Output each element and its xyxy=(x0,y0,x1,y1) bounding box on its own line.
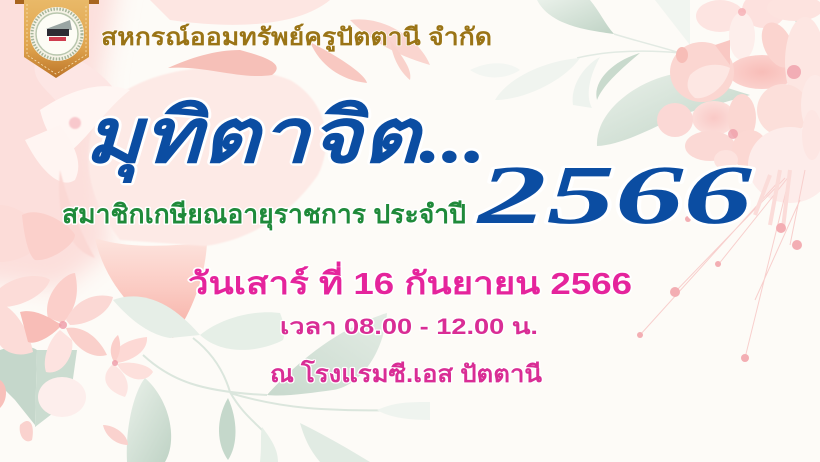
time: เวลา 08.00 - 12.00 น. xyxy=(280,314,538,339)
floral decoration: top right leaves xyxy=(470,0,800,146)
right large flower xyxy=(728,17,820,136)
rose bud xyxy=(670,40,734,102)
bud xyxy=(657,103,693,137)
floral decoration: right stamens xyxy=(637,170,805,362)
organization name: สหกรณ์ออมทรัพย์ครูปัตตานี จำกัด xyxy=(101,23,492,52)
date: วันเสาร์ ที่ 16 กันยายน 2566 xyxy=(188,261,632,301)
subtitle: สมาชิกเกษียณอายุราชการ ประจำปี xyxy=(62,199,466,231)
floral decoration: top pink leaves xyxy=(168,19,430,83)
pale flower xyxy=(38,377,86,417)
lower flower xyxy=(685,94,768,170)
floral decoration: top right flowers xyxy=(657,0,820,203)
venue: ณ โรงแรมซี.เอส ปัตตานี xyxy=(270,359,543,388)
floral decoration: large left flower xyxy=(0,0,330,338)
floral decoration: lower left flowers xyxy=(0,205,153,445)
pale lower right flower xyxy=(748,127,820,203)
small flower xyxy=(114,337,147,363)
top small flower xyxy=(696,0,786,60)
main title: มุทิตาจิต... xyxy=(84,95,486,183)
year: 2566 xyxy=(475,149,752,242)
floral decoration: lower leaves and stems xyxy=(0,296,430,462)
logo badge xyxy=(15,0,99,78)
